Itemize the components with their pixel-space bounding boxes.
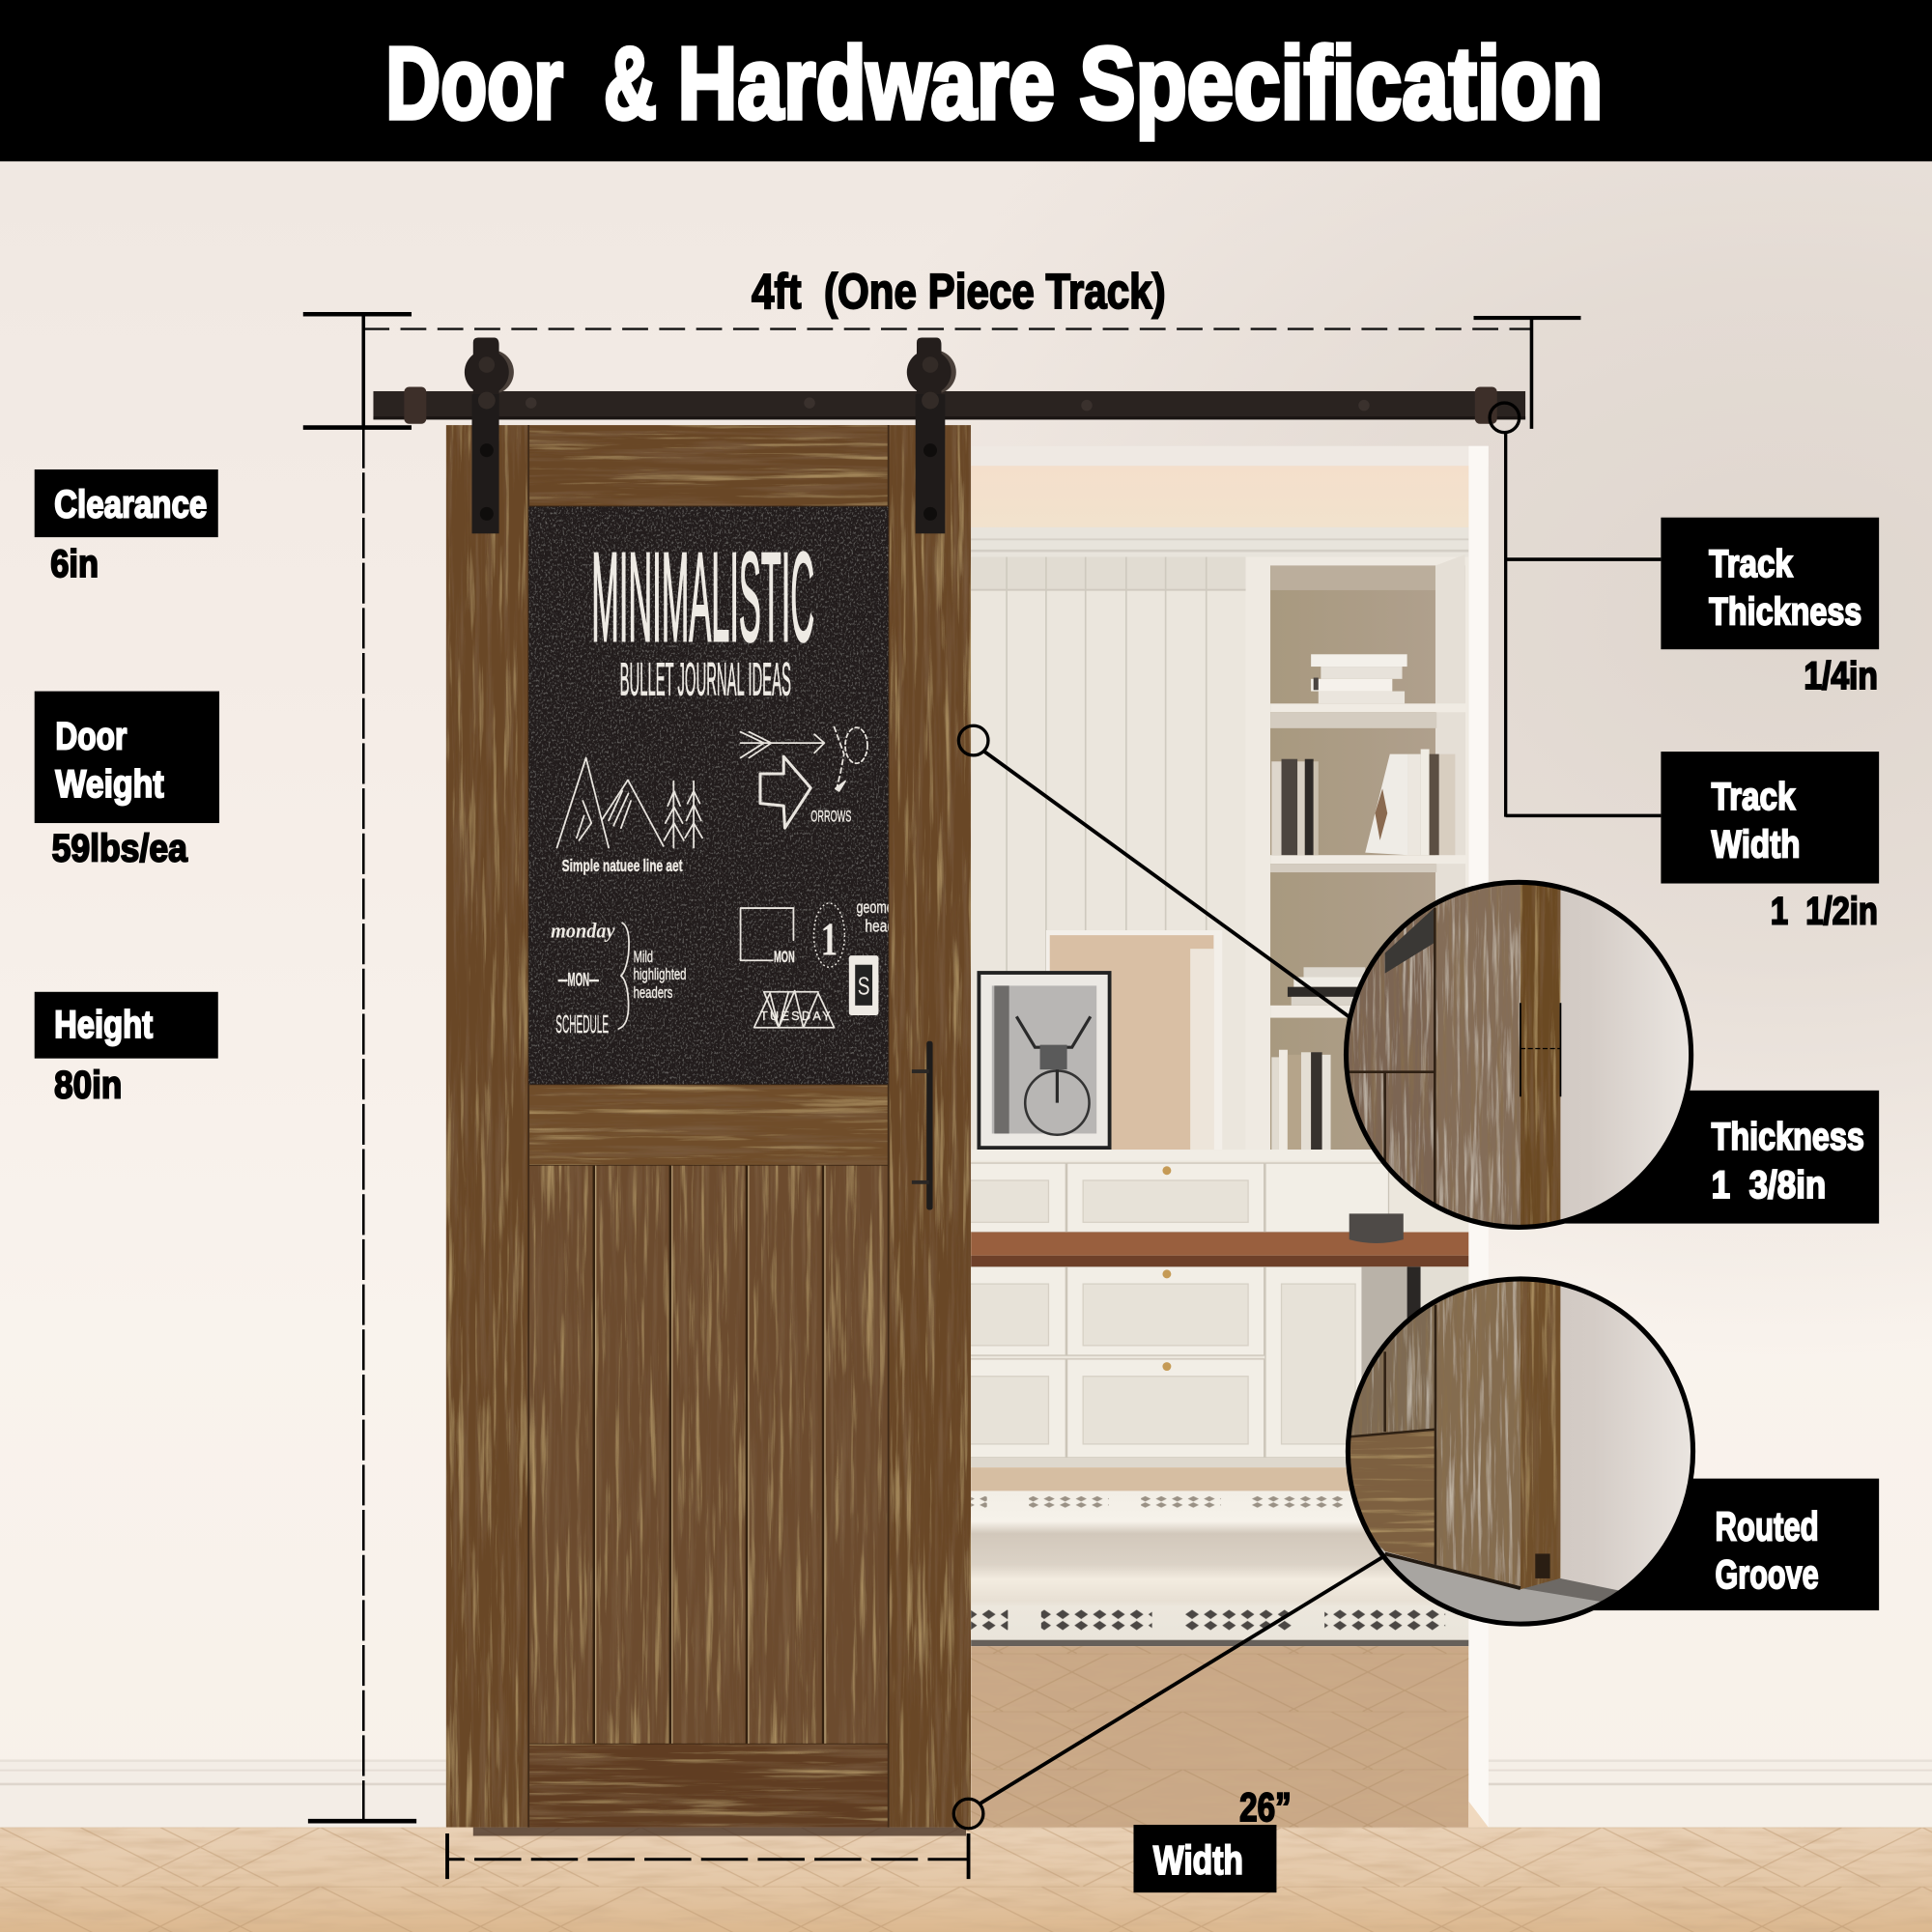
label: routed groove — [1589, 1479, 1879, 1610]
track stops — [404, 387, 1497, 424]
chalk schedule notes: monday — [551, 920, 615, 943]
chalkboard — [528, 506, 895, 1084]
books: stack — [1311, 654, 1407, 703]
detail lens: routed groove — [1343, 1276, 1700, 1651]
title: Door — [385, 26, 563, 140]
dimension: door width — [447, 1833, 969, 1879]
leader: door thickness — [958, 725, 1350, 1018]
sliding track — [373, 387, 1525, 424]
hanger: right — [907, 337, 956, 533]
door rails — [528, 425, 889, 1828]
chalk header samples: S — [858, 973, 870, 1000]
chalk header samples: geome — [856, 897, 894, 917]
dimension: door height — [308, 428, 416, 1821]
chalk schedule notes: Mild — [634, 948, 653, 966]
desk — [971, 1213, 1468, 1266]
label: track thickness: Track — [1709, 543, 1794, 585]
dimension: clearance bracket — [303, 314, 412, 428]
room floor and rug — [971, 1467, 1468, 1828]
value: width: 26” — [1239, 1784, 1292, 1830]
value: track thickness: 1/4in — [1804, 655, 1878, 697]
chalk header samples: TUESDAY — [760, 1009, 831, 1023]
ceiling glow — [971, 466, 1468, 527]
label: track thickness: Thickness — [1709, 591, 1861, 634]
label: height — [35, 992, 218, 1059]
title — [385, 26, 1603, 140]
title: Hardware — [678, 26, 1055, 140]
label: clearance — [35, 469, 218, 537]
label: door thickness: 1 3/8in — [1712, 1164, 1826, 1207]
door trim — [971, 446, 1489, 1828]
chalk schedule notes: highlighted — [634, 965, 686, 983]
hanger: left — [465, 337, 514, 533]
barn door: BULLET JOURNAL IDEAS — [620, 653, 791, 705]
label: clearance: Clearance — [54, 484, 207, 526]
label: track width: Width — [1712, 824, 1801, 867]
art: watercolor print — [1046, 930, 1222, 1150]
label: door weight — [35, 692, 219, 823]
chalk mountains — [557, 757, 702, 848]
chalk caption: arrows: ORROWS — [810, 808, 851, 826]
chalk schedule notes: headers — [634, 983, 672, 1002]
label: door thickness — [1552, 1091, 1879, 1224]
value: track width: 1 1/2in — [1771, 891, 1878, 933]
label: track width — [1661, 752, 1879, 884]
label: door weight: Weight — [55, 763, 164, 806]
label: door weight: Door — [55, 716, 127, 758]
value: door weight: 59lbs/ea — [52, 828, 188, 870]
baseboard — [0, 1759, 1932, 1828]
label: track width: Track — [1712, 776, 1796, 818]
door stiles — [446, 425, 971, 1828]
chalk schedule notes — [551, 920, 686, 1038]
chalk header samples: head — [865, 916, 895, 935]
title bar — [0, 0, 1932, 161]
label: routed groove: Groove — [1716, 1551, 1819, 1597]
bookcase — [1246, 554, 1468, 1161]
door planks — [528, 1166, 889, 1744]
value: clearance: 6in — [50, 543, 99, 585]
leader: routed groove — [953, 1555, 1386, 1829]
books: shelf 4 — [1271, 1050, 1331, 1150]
chalk schedule notes: —MON— — [558, 970, 599, 990]
title: & — [604, 26, 657, 140]
label: height: Height — [54, 1004, 153, 1046]
title: Specification — [1079, 26, 1603, 140]
chalk schedule notes: SCHEDULE — [555, 1011, 609, 1038]
chalk header samples: 1 — [820, 915, 838, 966]
books: shelf 3 — [1288, 967, 1365, 1006]
door shadow — [473, 1828, 966, 1836]
barn door — [446, 425, 971, 1836]
track callout leader lines — [1490, 403, 1661, 817]
thickness marks — [1520, 1003, 1560, 1096]
chalk arrows — [741, 727, 867, 828]
crown moulding — [971, 527, 1468, 557]
label: door thickness: Thickness — [1712, 1116, 1864, 1158]
beadboard wall — [971, 557, 1247, 1161]
floor: herringbone parquet — [0, 1828, 1932, 1932]
door handle — [912, 1041, 933, 1210]
art: bicycle photo — [977, 971, 1112, 1150]
label: width: Width — [1153, 1837, 1243, 1883]
chalk header samples — [741, 897, 895, 1028]
chalk header samples: MON — [774, 948, 795, 966]
value: height: 80in — [54, 1064, 122, 1106]
doorway room scene — [961, 446, 1468, 1828]
label: routed groove: Routed — [1716, 1503, 1819, 1548]
infographic: door and hardware specification: MINIMALISTIC — [591, 526, 814, 668]
chalk caption: nature: Simple natuee line aet — [562, 856, 683, 875]
cabinet and drawers — [961, 1150, 1468, 1467]
label: track thickness — [1661, 518, 1879, 649]
books: shelf 2 — [1271, 750, 1455, 855]
dimension: track length: 4ft (One Piece Track) — [752, 264, 1166, 319]
detail lens: door thickness — [1343, 880, 1695, 1233]
label: width — [1133, 1825, 1276, 1892]
